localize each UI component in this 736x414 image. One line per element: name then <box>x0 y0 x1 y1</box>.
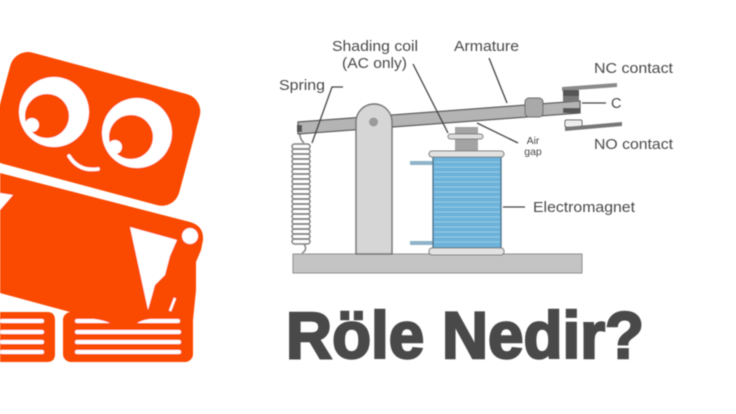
armature end cap <box>297 125 302 132</box>
label: shading coil: Shading coil <box>332 39 418 55</box>
coil top flange <box>429 151 504 157</box>
diagram labels <box>279 39 673 216</box>
robot left eye <box>19 77 89 147</box>
electromagnet core <box>448 127 483 151</box>
NC contact <box>562 83 617 102</box>
electromagnet coil <box>433 156 501 248</box>
coil terminals <box>410 161 434 245</box>
coil bottom flange <box>429 248 504 255</box>
armature clamp block <box>525 98 543 117</box>
C leader <box>582 102 606 104</box>
label: air gap: gap <box>524 146 542 158</box>
pivot hole <box>369 118 378 126</box>
relay diagram <box>292 83 622 273</box>
NO contact <box>565 120 622 131</box>
robot mascot <box>0 48 204 362</box>
label: NO contact: NO contact <box>594 137 673 153</box>
shading coil leader <box>413 64 448 133</box>
label: C: C <box>611 96 621 112</box>
moving contact <box>563 108 580 113</box>
body cut-out <box>130 227 177 310</box>
air gap leader <box>477 123 518 143</box>
label: NC contact: NC contact <box>594 61 673 77</box>
electromagnet leader <box>503 206 525 208</box>
robot smile <box>69 156 98 169</box>
robot body and arm <box>0 173 203 322</box>
pencil detail <box>170 298 175 311</box>
label: air gap: Air <box>527 135 539 147</box>
spring leader <box>312 87 343 143</box>
armature lever <box>298 101 580 134</box>
spring <box>292 128 310 253</box>
body notch <box>0 193 13 210</box>
label: spring: Spring <box>279 78 325 94</box>
right book <box>63 312 193 362</box>
label: electromagnet: Electromagnet <box>533 200 635 216</box>
pivot pillar <box>356 104 392 254</box>
arm joint <box>182 228 198 244</box>
diagram leader lines <box>312 58 606 207</box>
base plate <box>293 254 582 273</box>
label: AC only: (AC only) <box>342 56 407 72</box>
robot head <box>0 48 204 210</box>
title: Röle Nedir? <box>286 298 644 372</box>
label: armature: Armature <box>454 39 519 55</box>
left book <box>0 312 55 362</box>
armature leader <box>489 58 507 103</box>
robot right eye <box>102 98 172 168</box>
